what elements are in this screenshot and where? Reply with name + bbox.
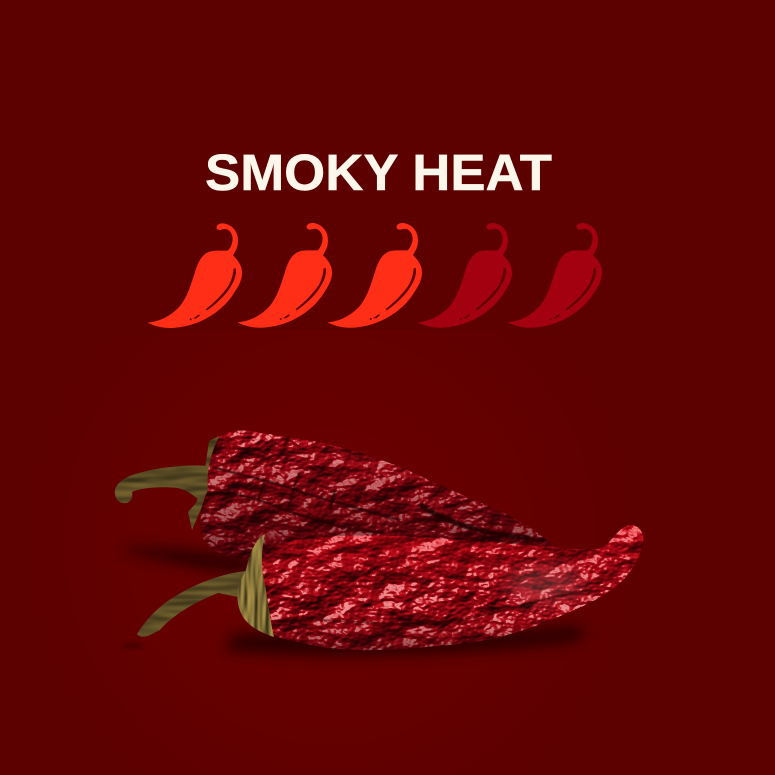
- bottom chili stem: [137, 571, 246, 637]
- bottom chili folds: [270, 567, 590, 624]
- title: SMOKY HEAT: [205, 144, 552, 201]
- top chili body: [200, 430, 555, 562]
- dried chili peppers illustration: [115, 430, 643, 656]
- bottom chili calyx: [237, 534, 274, 637]
- top chili stem: [115, 465, 208, 503]
- infographic canvas: [114, 154, 644, 714]
- top chili: [115, 430, 555, 562]
- top chili calyx: [188, 436, 219, 530]
- icon: chili lit 1: [148, 223, 242, 328]
- icon: chili dim 5: [508, 223, 602, 328]
- icon: chili lit 3: [328, 223, 422, 328]
- icon: chili dim 4: [418, 223, 512, 328]
- heat rating: 3 of 5 chilies: [148, 223, 602, 328]
- icon: chili lit 2: [238, 223, 332, 328]
- shadows: [122, 547, 585, 656]
- bottom chili: [137, 525, 643, 650]
- top chili creases: [208, 467, 530, 538]
- bottom chili body: [261, 525, 643, 650]
